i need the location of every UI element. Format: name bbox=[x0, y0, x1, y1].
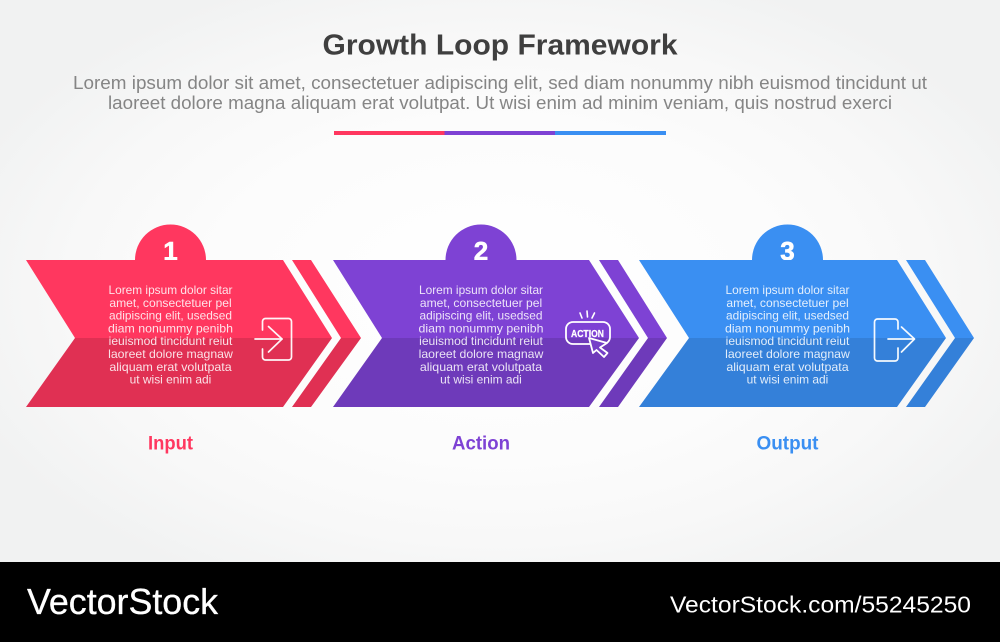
body text 3: laoreet dolore magnaw bbox=[725, 348, 851, 361]
panel: step 3 output bbox=[639, 224, 974, 407]
title: Growth Loop Framework bbox=[322, 30, 678, 62]
body text 1: ieuismod tincidunt reiut bbox=[109, 335, 233, 348]
body text 3: amet, consectetuer pel bbox=[726, 297, 849, 310]
footer logo text: VectorStock bbox=[27, 581, 219, 622]
arrow body 2 bbox=[333, 260, 639, 407]
body text 3: aliquam erat volutpata bbox=[726, 361, 849, 374]
tricolor divider bbox=[334, 131, 666, 135]
footer bar bbox=[0, 562, 1000, 642]
number badge 2: 2 bbox=[474, 236, 488, 266]
label: Output: Output bbox=[756, 434, 819, 454]
number badge 3 bbox=[752, 224, 823, 296]
body text 2: aliquam erat volutpata bbox=[420, 361, 543, 374]
body text 3: adipiscing elit, usedsed bbox=[726, 310, 849, 323]
arrow body 3 bbox=[639, 260, 946, 407]
body text 2: ut wisi enim adi bbox=[440, 374, 522, 387]
label: Action: Action bbox=[452, 434, 510, 454]
icon: login bbox=[255, 318, 292, 360]
body text 1: laoreet dolore magnaw bbox=[108, 348, 234, 361]
panel: step 1 input bbox=[26, 224, 361, 407]
body text 2: diam nonummy penibh bbox=[418, 322, 544, 335]
number badge 1 bbox=[135, 224, 206, 296]
footer url: VectorStock.com/55245250 bbox=[670, 592, 971, 618]
icon: action button with cursor: ACTION bbox=[571, 329, 604, 340]
body text 1: diam nonummy penibh bbox=[108, 322, 233, 335]
subtitle bbox=[73, 73, 927, 113]
number badge 2 bbox=[446, 224, 516, 296]
number badge 3: 3 bbox=[780, 236, 795, 266]
label: Input: Input bbox=[148, 434, 194, 454]
body text 1: amet, consectetuer pel bbox=[109, 297, 232, 310]
number badge 1: 1 bbox=[163, 236, 178, 266]
body text 3: ut wisi enim adi bbox=[747, 374, 828, 387]
body text 1: adipiscing elit, usedsed bbox=[109, 310, 232, 323]
body text 2: laoreet dolore magnaw bbox=[419, 348, 544, 361]
body text 1: Lorem ipsum dolor sitar bbox=[108, 284, 233, 297]
body text 1 bbox=[108, 284, 234, 387]
body text 3: ieuismod tincidunt reiut bbox=[726, 335, 850, 348]
body text 3: Lorem ipsum dolor sitar bbox=[726, 284, 850, 297]
icon: action button with cursor bbox=[566, 311, 610, 357]
chevron 3 bbox=[906, 260, 974, 407]
body text 1: ut wisi enim adi bbox=[130, 374, 211, 387]
chevron 1 bbox=[292, 260, 361, 407]
arrow body 1 bbox=[26, 260, 332, 407]
icon: logout bbox=[874, 319, 914, 361]
body text 2 bbox=[418, 284, 544, 387]
body text 2: ieuismod tincidunt reiut bbox=[419, 335, 544, 348]
body text 2: Lorem ipsum dolor sitar bbox=[419, 284, 543, 297]
body text 2: amet, consectetuer pel bbox=[420, 297, 542, 310]
subtitle: laoreet dolore magna aliquam erat volutpat. Ut wisi enim ad minim veniam, quis nostrud exerci bbox=[108, 93, 892, 113]
subtitle: Lorem ipsum dolor sit amet, consectetuer adipiscing elit, sed diam nonummy nibh euismod tincidunt ut bbox=[73, 73, 927, 93]
body text 2: adipiscing elit, usedsed bbox=[420, 310, 542, 323]
panel: step 2 action bbox=[333, 224, 667, 407]
body text 3 bbox=[725, 284, 851, 387]
body text 1: aliquam erat volutpata bbox=[109, 361, 232, 374]
body text 3: diam nonummy penibh bbox=[725, 322, 850, 335]
chevron 2 bbox=[599, 260, 667, 407]
